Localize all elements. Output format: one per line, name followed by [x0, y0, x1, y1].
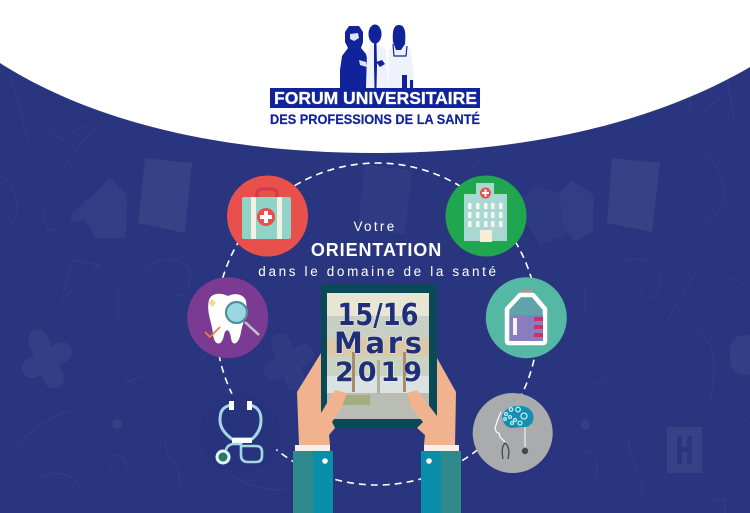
date text: 15/16 [338, 298, 418, 333]
logo figure: right doctor [388, 25, 415, 88]
right hand and sleeve [407, 358, 461, 513]
logo figure: centre doctor [366, 24, 388, 88]
icon: bottle [486, 277, 567, 358]
dashed orbit ring [216, 163, 538, 485]
logo subtitle: DES PROFESSIONS DE LA SANTÉ [270, 112, 480, 127]
icon: first aid kit [227, 176, 308, 256]
icon: hospital building [446, 176, 526, 256]
faint medical background pattern [18, 158, 750, 473]
icon: brain and stethoscope [473, 393, 553, 473]
text: ORIENTATION: ORIENTATION [311, 240, 442, 260]
left hand and sleeve [293, 353, 347, 513]
icon: tooth with magnifier [187, 277, 268, 358]
tablet [321, 284, 437, 428]
logo banner: FORUM UNIVERSITAIRE [274, 88, 477, 108]
white curved header [0, 0, 750, 153]
tablet screen photo [327, 293, 429, 419]
icon: stethoscope [200, 393, 280, 473]
date text: Mars [334, 326, 422, 360]
date text [334, 298, 422, 388]
logo figure: doctor with mask [340, 26, 368, 88]
text: dans le domaine de la santé: dans le domaine de la santé [258, 264, 499, 279]
logo [270, 24, 480, 127]
date text: 2019 [335, 357, 422, 388]
text: Votre: Votre [353, 219, 397, 234]
